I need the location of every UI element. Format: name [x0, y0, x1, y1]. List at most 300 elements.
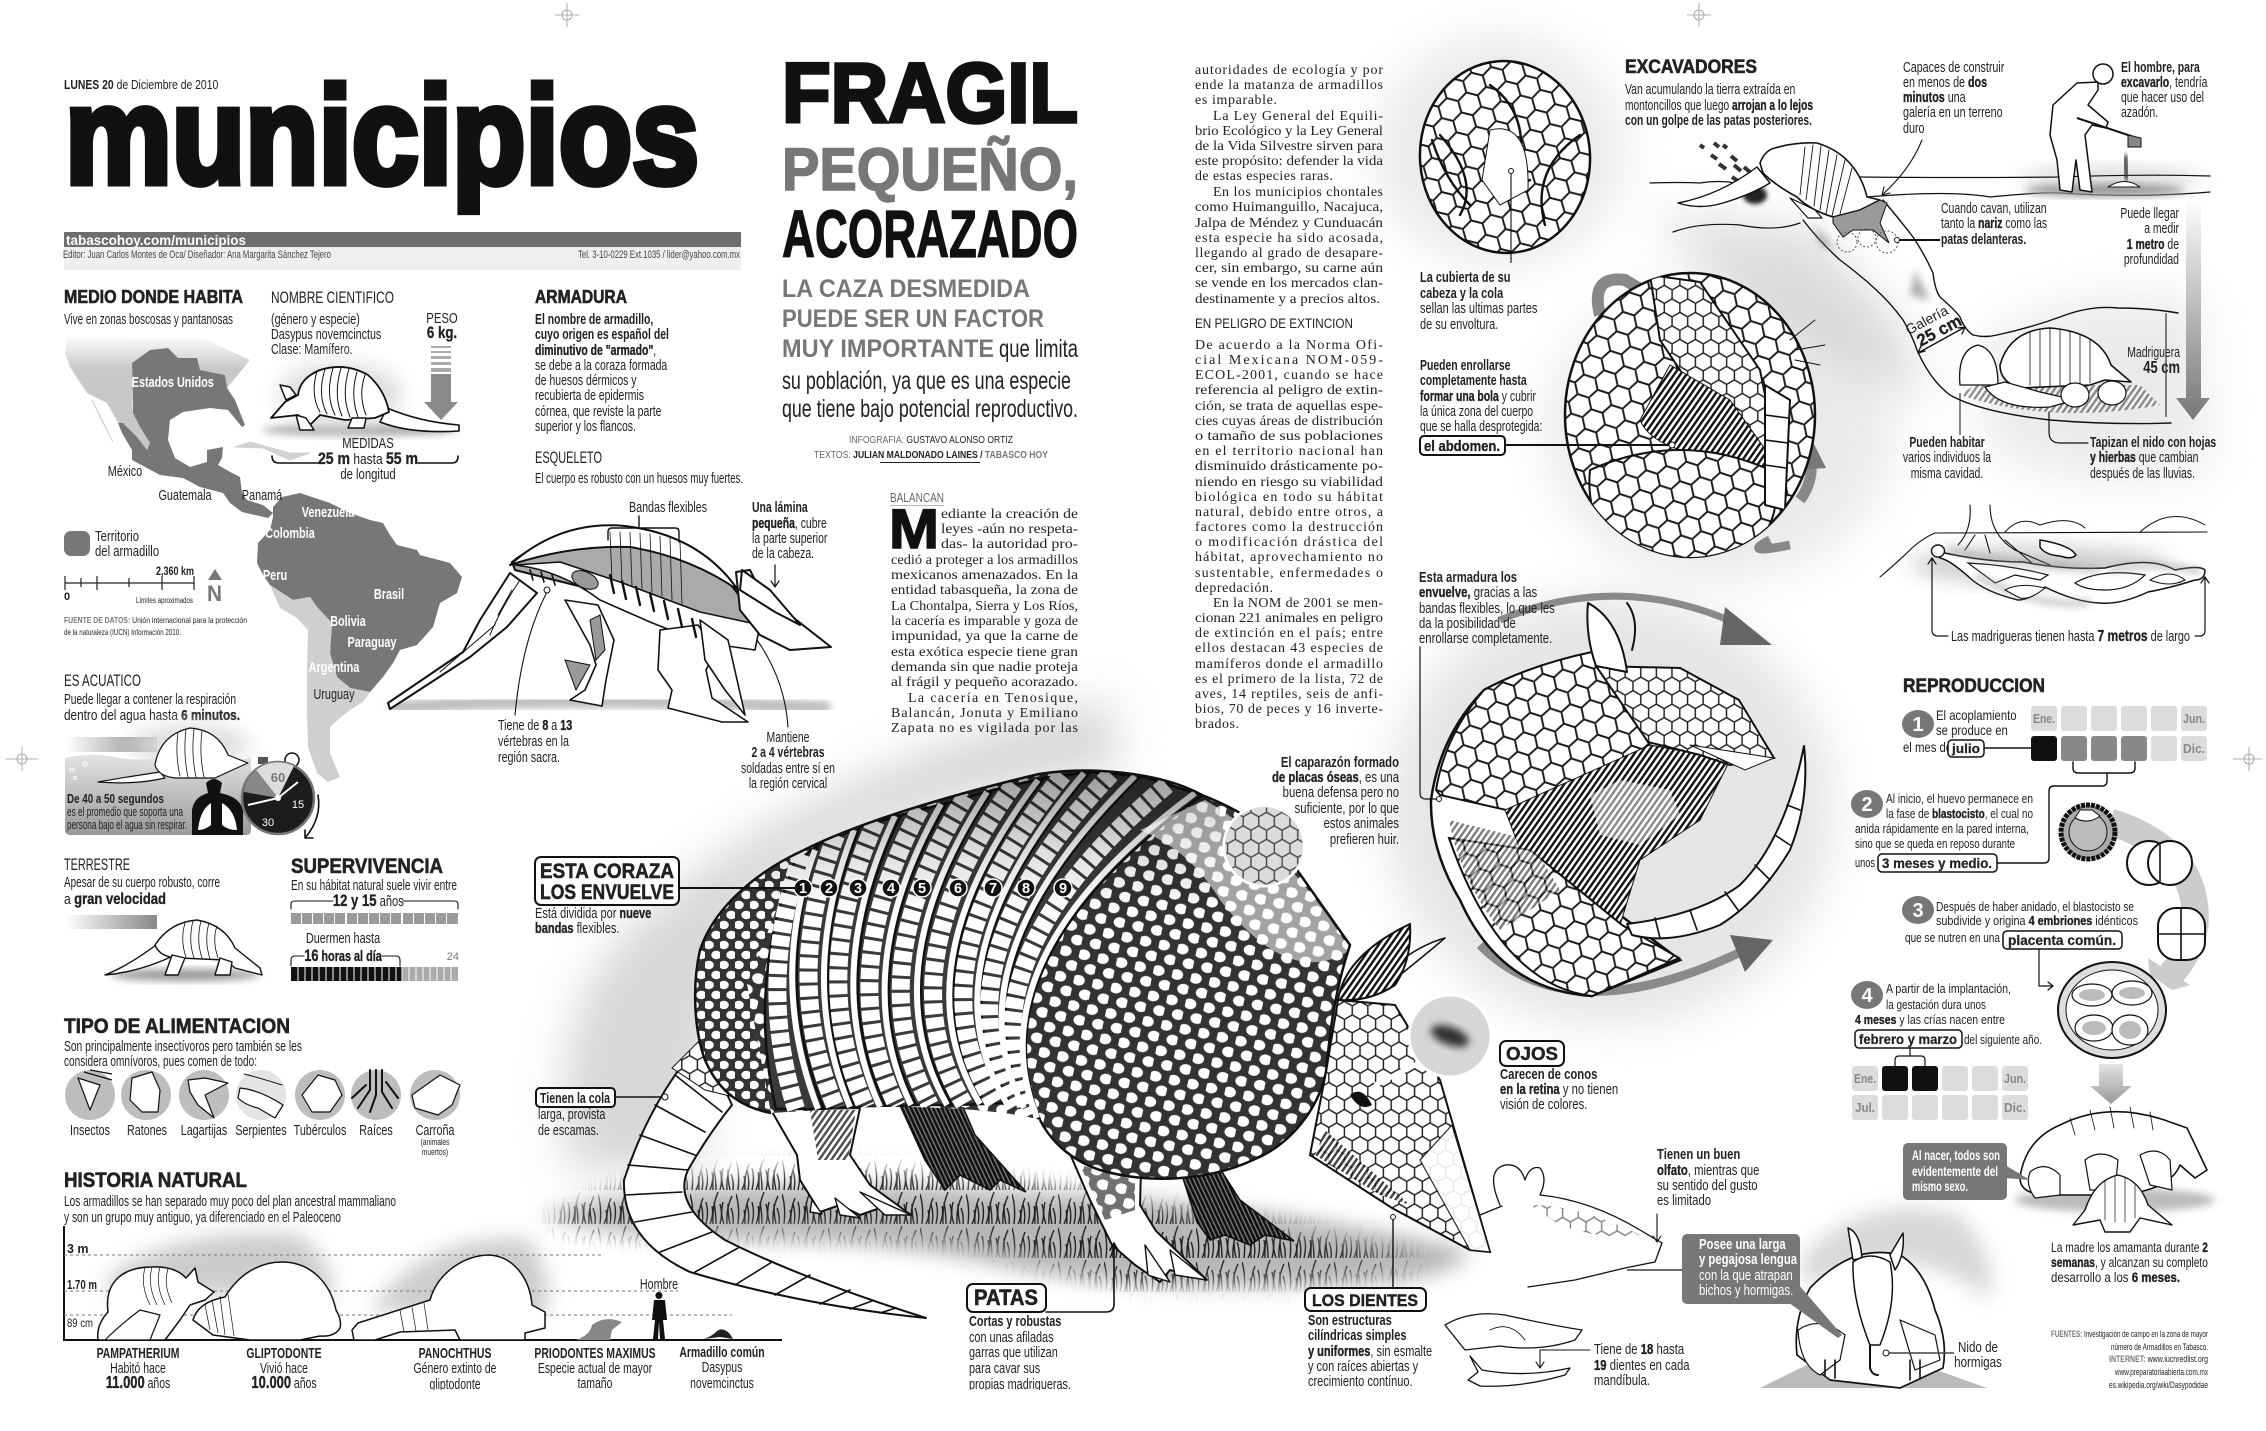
callout: lengua: y pegajosa lengua	[1699, 1251, 1798, 1267]
species labels: Dasypus	[702, 1359, 742, 1375]
label vertebras sacra: vértebras en la	[498, 732, 570, 749]
numbers 1-9: 8	[1022, 881, 1030, 897]
callout: habitar: misma cavidad.	[1911, 465, 1983, 481]
web bar: Tel. 3-10-0229 Ext.1035 / lider@yahoo.com.mx	[578, 249, 740, 261]
step 3: placenta común.	[2008, 932, 2116, 948]
article column 1: al frágil y pequeño acorazado.	[891, 675, 1078, 690]
article column 2: disminuido drásticamente po-	[1195, 459, 1383, 474]
peso arrow: 6 kg.	[427, 324, 457, 342]
bracket 12 y 15	[291, 891, 458, 910]
panel: nombre cientifico: Dasypus novemcinctus	[271, 325, 381, 342]
article column 2: este propósito: defender la vida	[1195, 154, 1384, 169]
armadillo comun	[704, 1329, 733, 1339]
callout: ojos: en la retina y no tienen	[1500, 1081, 1618, 1097]
calendar 1: Ene.	[2033, 711, 2055, 726]
callout: armadura: enrollarse completamente.	[1419, 630, 1552, 646]
callout: cubierta: cabeza y la cola	[1420, 284, 1504, 301]
bar years	[291, 913, 458, 924]
stopwatch: 15	[292, 799, 304, 811]
callout: caparazon: prefieren huir.	[1330, 831, 1399, 847]
drop cap: M	[889, 497, 939, 560]
callout: los dientes: Son estructuras	[1308, 1311, 1392, 1328]
arrow	[65, 737, 157, 752]
callout: caparazon: buena defensa pero no	[1283, 784, 1399, 800]
callout: tapizan: Tapizan el nido con hojas	[2090, 434, 2216, 450]
article column 2: aves, 14 reptiles, seis de anfi-	[1195, 687, 1383, 702]
callout: olfato: su sentido del gusto	[1657, 1177, 1758, 1193]
article column 1: Zapata no es vigilada por las	[891, 721, 1078, 736]
chart: height comparison: 3 m	[67, 1242, 89, 1256]
tail	[624, 1040, 926, 1318]
label vertebras cervical: soldadas entre sí en	[741, 760, 835, 776]
panel: terrestre: a gran velocidad	[64, 891, 166, 908]
callout: olfato	[1653, 1146, 1759, 1242]
subheadline: MUY IMPORTANTE	[782, 335, 994, 363]
numbers 1-9: 3	[854, 881, 862, 897]
food labels: muertos)	[422, 1147, 448, 1157]
map of the Americas: Uruguay	[313, 685, 355, 702]
calendar 2: Dic.	[2004, 1100, 2026, 1115]
headline: FRAGIL	[782, 46, 1078, 140]
label vertebras sacra	[498, 587, 572, 765]
callout: lengua: con la que atrapan	[1699, 1267, 1793, 1283]
credits: TEXTOS: JULIAN MALDONADO LAINES / TABASCO HOY	[814, 449, 1048, 461]
inset: eye	[1375, 995, 1491, 1085]
map legend: del armadillo	[95, 543, 159, 559]
depth arrow	[2120, 197, 2210, 420]
callout: tapizan	[2049, 412, 2216, 481]
article column 2: destinamente y a precios altos.	[1195, 292, 1380, 307]
peso arrow	[424, 310, 458, 420]
article column 2: hábitat, aprovechamiento no	[1195, 550, 1383, 565]
callout: enrollarse: la única zona del cuerpo	[1420, 403, 1533, 419]
map of the Americas: Peru	[263, 566, 287, 583]
callout: enrollarse: Pueden enrollarse	[1420, 357, 1510, 373]
subheadline: que tiene bajo potencial reproductivo.	[782, 395, 1078, 423]
panel: excavadores: montoncillos que luego arrojan a lo lejos	[1625, 98, 1813, 114]
bracket 12 y 15: 12 y 15 años	[333, 891, 404, 910]
burrow diagram	[1880, 505, 2209, 645]
panel: historia natural: HISTORIA NATURAL	[64, 1169, 247, 1192]
map of the Americas: Brasil	[374, 585, 404, 602]
callout: dos minutos	[1882, 58, 2005, 195]
food labels: Ratones	[127, 1121, 167, 1138]
article column 2: biológica en todo su hábitat	[1195, 490, 1383, 505]
callout: esta coraza: Está dividida por nueve	[535, 904, 651, 921]
pampatherium	[98, 1267, 214, 1340]
numbers 1-9	[794, 879, 1072, 897]
article column 2: o modificación drástica del	[1195, 535, 1383, 550]
food icons	[65, 1070, 460, 1120]
panel: es acuatico: Puede llegar a contener la respiración	[64, 692, 236, 708]
panel: tipo de alimentacion: Son principalmente insectívoros pero también se les	[64, 1039, 302, 1055]
label una lamina: Una lámina	[752, 499, 808, 515]
article column 1: das- la autoridad pro-	[941, 537, 1078, 552]
article column 2: mamíferos donde el armadillo	[1195, 657, 1383, 672]
species labels: gliptodonte	[429, 1376, 481, 1392]
callout: caparazon: El caparazón formado	[1281, 754, 1399, 770]
shell outline	[695, 771, 1350, 1179]
numbers 1-9: 6	[954, 881, 962, 897]
article column 2: cer, sin embargo, su carne aún	[1195, 261, 1383, 276]
calendar 1: Dic.	[2183, 741, 2205, 756]
medidas: 25 m hasta 55 m	[318, 449, 418, 468]
label una lamina: pequeña, cubre	[752, 515, 827, 531]
map of the Americas: Colombia	[265, 524, 315, 541]
label vertebras cervical	[741, 640, 835, 791]
web bar: Editor: Juan Carlos Montes de Oca/ Diseñador: Ana Margarita Sánchez Tejero	[63, 249, 331, 261]
article column 2: de extinción en el país; entre	[1195, 626, 1383, 641]
person silhouette	[192, 779, 243, 835]
panel: supervivencia: En su hábitat natural suele vivir entre	[291, 878, 457, 894]
article column 2: de estas especies raras.	[1195, 169, 1333, 184]
food labels: Carroña	[416, 1121, 455, 1138]
credits: INFOGRAFIA: GUSTAVO ALONSO ORTIZ	[849, 434, 1013, 446]
callout: tienen la cola: de escamas.	[538, 1121, 599, 1138]
stopwatch: 60	[271, 770, 285, 785]
armadillo running	[105, 920, 262, 981]
article column 1: La cacería en Tenosique,	[908, 691, 1078, 706]
man digging	[2025, 64, 2185, 196]
water box: De 40 a 50 segundos	[67, 791, 164, 806]
band scales	[777, 774, 1167, 1115]
depth arrow: a medir	[2144, 220, 2179, 236]
bands	[765, 772, 1202, 1120]
map of the Americas: Argentina	[309, 658, 360, 675]
species labels: PRIODONTES MAXIMUS	[534, 1345, 656, 1361]
callout: los dientes: y con raíces abiertas y	[1308, 1357, 1419, 1374]
article column 1: BALANCAN	[890, 491, 944, 505]
panochthus	[352, 1255, 545, 1340]
step 4	[1851, 981, 2042, 1048]
panel: historia natural: y son un grupo muy antiguo, ya diferenciado en el Paleoceno	[64, 1210, 341, 1226]
article column 2: cies cuyas áreas de distribución	[1195, 414, 1383, 429]
panel: es acuatico	[64, 671, 319, 838]
article column 2: En los municipios chontales	[1213, 185, 1383, 200]
medidas	[272, 435, 458, 482]
panel: armadura: recubierta de epidermis	[535, 387, 644, 403]
callout: tienen la cola: Tienen la cola	[540, 1091, 611, 1107]
callout: cubierta: de su envoltura.	[1420, 315, 1498, 332]
article column 2: ción, se trata de aquellas espe-	[1195, 399, 1383, 414]
label una lamina: de la cabeza.	[752, 545, 814, 561]
priodontes	[576, 1319, 622, 1340]
callout: ojos	[1500, 1041, 1618, 1112]
calendar 2	[1852, 1048, 2028, 1120]
article column 2: Jalpa de Méndez y Cunduacán	[1195, 216, 1383, 231]
callout: nariz: patas delanteras.	[1941, 231, 2026, 247]
callout: ojos: Carecen de conos	[1500, 1066, 1597, 1082]
panel: armadura: El nombre de armadillo,	[535, 311, 653, 327]
panel: armadura: diminutivo de "armado",	[535, 342, 656, 358]
species labels: tamaño	[578, 1375, 612, 1391]
panel: supervivencia	[291, 855, 459, 981]
label una lamina	[752, 499, 827, 587]
panel: esqueleto	[388, 448, 835, 791]
step 2: 2	[1861, 794, 1873, 816]
panel: terrestre: TERRESTRE	[64, 855, 130, 874]
subheadline: PUEDE SER UN FACTOR	[782, 305, 1044, 333]
article column 2: De acuerdo a la Norma Ofi-	[1195, 338, 1383, 353]
species labels: 11.000 años	[106, 1373, 170, 1393]
callout: dos minutos: minutos una	[1903, 88, 1966, 105]
species labels: Armadillo común	[679, 1344, 765, 1360]
step 1: El acoplamiento	[1936, 708, 2017, 723]
panel: armadura: de huesos dérmicos y	[535, 372, 637, 388]
data source: FUENTE DE DATOS: Unión internacional para la protección	[64, 615, 247, 625]
panel: excavadores	[1625, 57, 2216, 481]
credits	[814, 434, 1048, 463]
sources: número de Armadillos en Tabasco.	[2111, 1342, 2208, 1353]
depth arrow: profundidad	[2124, 251, 2179, 267]
callout: cubierta	[1420, 168, 1537, 332]
subheadline: su población, ya que es una especie	[782, 367, 1071, 395]
numbers 1-9: 2	[825, 881, 833, 897]
article column 2: autoridades de ecología y por	[1195, 63, 1383, 78]
head with tongue	[1480, 1165, 1694, 1287]
callout: los dientes: y uniformes, sin esmalte	[1308, 1342, 1432, 1359]
far legs	[900, 1105, 1026, 1192]
callout: enrollarse: formar una bola y cubrir	[1420, 388, 1536, 404]
article column 1: ediante la creación de	[941, 507, 1078, 522]
callout: patas: PATAS	[974, 1285, 1038, 1310]
article column 2: llegando al grado de desapare-	[1195, 246, 1383, 261]
panel: armadura: superior y los flancos.	[535, 418, 636, 434]
shell	[690, 760, 1370, 1190]
callout: armadura	[1419, 569, 1555, 802]
armadillo small	[262, 363, 459, 436]
sources	[2051, 1329, 2208, 1391]
label bandas flexibles: Bandas flexibles	[629, 498, 707, 515]
map of the Americas: Venezuela	[302, 503, 355, 520]
food labels: Tubérculos	[294, 1121, 346, 1138]
article column 1: La Chontalpa, Sierra y Los Ríos,	[891, 599, 1078, 614]
article column 1	[889, 491, 1079, 736]
callout: habitar: Pueden habitar	[1909, 434, 1985, 450]
panel: nombre cientifico: Clase: Mamífero.	[271, 340, 353, 357]
head	[1310, 924, 1490, 1252]
map scale: Límites aproximados	[136, 596, 193, 605]
callout: habitar	[1903, 393, 1992, 481]
species labels	[97, 1344, 765, 1393]
label nido	[1883, 1339, 2002, 1370]
callout: caparazon: estos animales	[1324, 815, 1399, 831]
soil and tunnel: 25 cm	[1914, 311, 1965, 350]
grass	[538, 1152, 1474, 1302]
numbers 1-9: 5	[918, 881, 926, 897]
label 16 horas: 24	[447, 951, 459, 963]
callout: los dientes: cilíndricas simples	[1308, 1326, 1406, 1343]
article column 1: entidad tabasqueña, la zona de	[891, 583, 1078, 598]
callout: azadon	[2121, 59, 2208, 120]
stopwatch: 30	[262, 817, 274, 829]
water box: es el promedio que soporta una	[67, 804, 183, 819]
callout: esta coraza: ESTA CORAZA	[540, 860, 674, 883]
step 1	[1902, 708, 2031, 757]
callout: patas: para cavar sus	[969, 1359, 1040, 1376]
text madre: semanas, y alcanzan su completo	[2051, 1255, 2208, 1270]
callout: enrollarse: que se halla desprotegida:	[1420, 418, 1542, 434]
label dientes mandibula: mandíbula.	[1594, 1372, 1650, 1388]
map of the Americas: Estados Unidos	[132, 373, 214, 390]
calendar 2: Jul.	[1855, 1100, 1875, 1115]
article column 1: Balancán, Jonuta y Emiliano	[891, 706, 1078, 721]
label vertebras cervical: la región cervical	[749, 775, 827, 791]
label vertebras cervical: 2 a 4 vértebras	[751, 744, 825, 760]
article column 2: ECOL-2001, cuando se hace	[1195, 368, 1383, 383]
species labels: Vivió hace	[260, 1360, 308, 1376]
map of the Americas: México	[108, 462, 142, 479]
article column 2	[1195, 63, 1384, 732]
stopwatch	[242, 753, 319, 838]
step 4: febrero y marzo	[1859, 1031, 1957, 1047]
map of the Americas: Panamá	[242, 486, 283, 503]
callout: patas: propias madrigueras.	[969, 1375, 1071, 1392]
food labels	[70, 1121, 455, 1157]
step 4: A partir de la implantación,	[1886, 981, 2011, 996]
callout: los dientes: LOS DIENTES	[1312, 1291, 1418, 1310]
map of the Americas: Bolivia	[330, 612, 367, 629]
numbers 1-9: 1	[799, 881, 807, 897]
label vertebras sacra: Tiene de 8 a 13	[498, 716, 572, 733]
callout: patas: con unas afiladas	[969, 1328, 1054, 1345]
article column 2: o tamaño de sus poblaciones	[1195, 429, 1383, 444]
callout: los dientes: crecimiento contínuo.	[1308, 1372, 1413, 1389]
cell division	[2061, 805, 2205, 990]
article column 2: cial Mexicana NOM-059-	[1195, 353, 1383, 368]
step 1: se produce en	[1936, 723, 2008, 738]
headline: ACORAZADO	[782, 197, 1078, 272]
headline: PEQUEÑO,	[782, 136, 1078, 203]
subheadline: que limita	[999, 335, 1078, 363]
panel: tipo de alimentacion	[64, 1015, 460, 1157]
map scale	[64, 564, 194, 605]
label 7 metros: Las madrigueras tienen hasta 7 metros de largo	[1951, 628, 2190, 645]
label nido: hormigas	[1954, 1354, 2002, 1370]
panel: esqueleto: El cuerpo es robusto con un huesos muy fuertes.	[535, 471, 743, 487]
callout: azadon: que hacer uso del	[2121, 89, 2204, 105]
masthead	[63, 59, 741, 270]
panel: armadura	[535, 287, 669, 434]
map of the Americas: Paraguay	[348, 633, 397, 650]
date line: LUNES 20 de Diciembre de 2010	[64, 78, 219, 92]
panel: armadura: se debe a la coraza formada	[535, 357, 668, 373]
callout: nariz: Cuando cavan, utilizan	[1941, 200, 2047, 216]
near rear leg	[771, 1108, 911, 1218]
callout: habitar: varios individuos la	[1903, 449, 1992, 465]
skeleton drawing	[388, 525, 831, 722]
numbers 1-9: 4	[887, 881, 895, 897]
medidas: MEDIDAS	[342, 435, 394, 451]
step 2: 3 meses y medio.	[1882, 855, 1992, 871]
icon: north arrow	[207, 569, 222, 606]
data source: de la naturaleza (IUCN) Información 2010.	[64, 627, 181, 637]
panel: armadura: cuyo origen es español del	[535, 326, 669, 342]
callout: armadura: envuelve, gracias a las	[1419, 584, 1538, 600]
step 4: 4	[1861, 985, 1873, 1007]
callout: patas: Cortas y robustas	[969, 1312, 1061, 1329]
label 7 metros	[1928, 558, 2209, 645]
panel: medio donde habita	[64, 287, 462, 782]
section title municipios: municipios	[65, 59, 699, 213]
callout: nariz	[1894, 200, 2047, 247]
digging armadillo	[1678, 143, 1898, 253]
depth arrow: 1 metro de	[2127, 236, 2179, 252]
label vertebras cervical: Mantiene	[767, 729, 809, 745]
article column 1: impunidad, ya que la carne de	[891, 629, 1078, 644]
step 3	[1902, 896, 2138, 990]
step 4: del siguiente año.	[1964, 1032, 2042, 1047]
map scale: 2,360 km	[156, 564, 194, 578]
placenta	[2058, 962, 2166, 1058]
article column 2: natural, debido entre otros, a	[1195, 505, 1384, 520]
article column 2: esta especie ha sido acosada,	[1195, 231, 1383, 246]
panel: es acuatico: ES ACUATICO	[64, 671, 141, 690]
chart: height comparison: 89 cm	[67, 1316, 93, 1330]
chart: height comparison: 1.70 m	[67, 1278, 97, 1292]
bar hours	[291, 967, 458, 981]
panel: terrestre: Apesar de su cuerpo robusto, corre	[64, 875, 220, 891]
species labels: GLIPTODONTE	[246, 1345, 322, 1361]
sources: es.wikipedia.org/wiki/Dasypodidae	[2109, 1380, 2208, 1391]
callout: azadon: excavarlo, tendría	[2121, 74, 2208, 90]
callout: olfato: olfato, mientras que	[1657, 1162, 1759, 1178]
step 2: sino que se queda en reposo durante	[1855, 836, 2015, 851]
callout: tapizan: y hierbas que cambian	[2090, 449, 2198, 465]
species labels: Especie actual de mayor	[538, 1360, 652, 1376]
callout: al nacer: mismo sexo.	[1912, 1179, 1968, 1194]
panel: tipo de alimentacion: TIPO DE ALIMENTACION	[64, 1015, 290, 1038]
callout: los dientes	[1305, 1214, 1432, 1389]
callout: ojos: visión de colores.	[1500, 1096, 1587, 1112]
rolled armadillo A	[1414, 55, 1596, 259]
article column 2: ende la matanza de armadillos	[1195, 78, 1383, 93]
label 16 horas: 16 horas al día	[304, 946, 383, 966]
calendar 1: Jun.	[2183, 711, 2205, 726]
numbers 1-9: 7	[989, 881, 997, 897]
callout: lengua: bichos y hormigas.	[1699, 1282, 1793, 1298]
article column 2: brio Ecológico y la Ley General	[1195, 124, 1383, 139]
soil and tunnel: Galería	[1903, 302, 1951, 338]
callout: tienen la cola: larga, provista	[538, 1105, 606, 1122]
step 4: la gestación dura unos	[1886, 997, 1986, 1012]
step 2: la fase de blastocisto, el cual no	[1886, 806, 2033, 821]
article column 2: factores como la destrucción	[1195, 520, 1383, 535]
callout: caparazon	[1272, 754, 1400, 847]
label dientes mandibula: Tiene de 18 hasta	[1594, 1341, 1685, 1357]
armadillo frontal	[1760, 1228, 1987, 1388]
step 2: unos	[1855, 855, 1875, 870]
article column 1: demanda sin que nadie proteja	[891, 660, 1079, 675]
panel: reproduccion	[1851, 676, 2215, 1391]
article column 2: es el primero de la lista, 72 de	[1195, 672, 1383, 687]
burrow armadillos	[1960, 328, 2160, 413]
step 1: el mes de	[1903, 740, 1952, 755]
callout: armadura: da la posibilidad de	[1419, 615, 1516, 631]
depth arrow: Puede llegar	[2120, 205, 2179, 221]
callout: ojos: OJOS	[1506, 1044, 1558, 1064]
food labels: Raíces	[359, 1121, 393, 1138]
arrow to birth	[2090, 1064, 2132, 1104]
article column 2: cionan 221 animales en peligro	[1195, 611, 1383, 626]
data source	[64, 615, 247, 637]
article column 2: brados.	[1195, 717, 1239, 732]
panel: terrestre	[64, 855, 262, 981]
text madre: La madre los amamanta durante 2	[2051, 1240, 2208, 1255]
top shading	[742, 772, 1220, 898]
gliptodonte	[193, 1262, 340, 1340]
food labels: Lagartijas	[181, 1121, 227, 1138]
